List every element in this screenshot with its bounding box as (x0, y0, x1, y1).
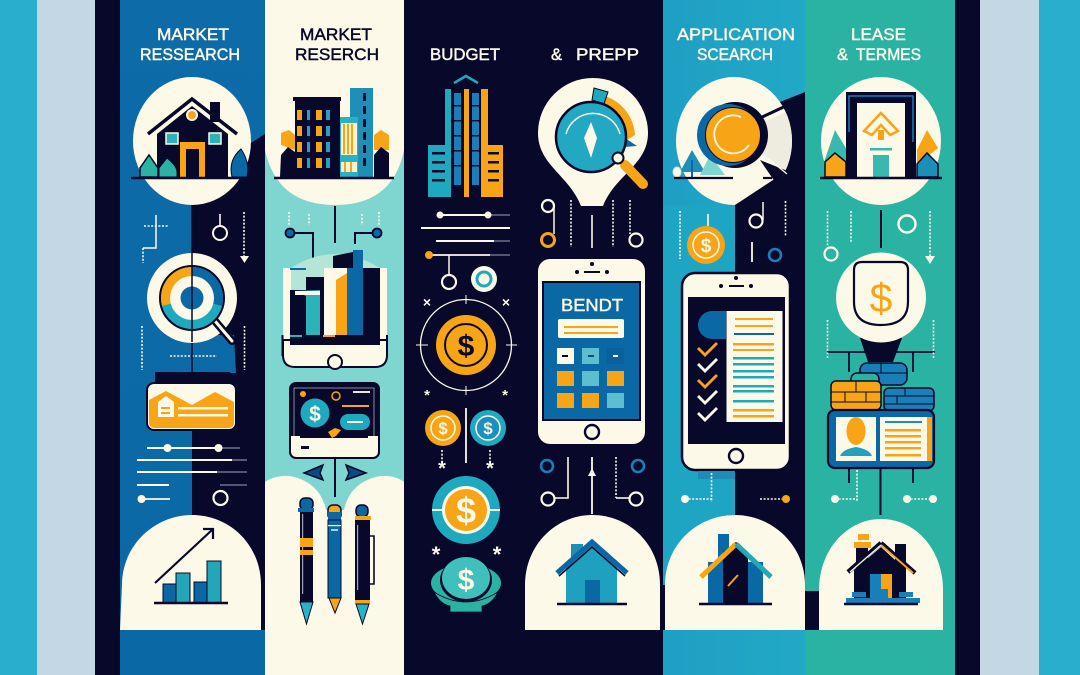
icon: large coin: * (432, 542, 441, 567)
connectors (286, 206, 382, 262)
panel: column 2 market research (265, 0, 404, 675)
icon: city buildings (274, 88, 394, 178)
connectors and coin: $ (701, 236, 712, 257)
heading (677, 26, 795, 64)
icon: two coins: * (486, 458, 494, 480)
icon: monitor with dollar: $ (309, 403, 321, 426)
icon: two coins (425, 408, 506, 480)
icon: magnifier pin (538, 78, 648, 206)
icon: coin with compass ring: × (502, 294, 510, 310)
icon: coin with compass ring: * (502, 387, 508, 404)
icon: house in arch (819, 519, 943, 630)
heading: TERMES (856, 46, 921, 64)
icon: tablet with bar chart (282, 250, 387, 369)
icon: magnifier with donut chart (147, 253, 237, 343)
sliders (421, 212, 510, 292)
panel: column 1 market research (120, 0, 265, 675)
connectors lower (831, 468, 937, 515)
heading (295, 26, 379, 64)
icon: tower (428, 76, 503, 197)
icon: coin stack (431, 557, 501, 612)
connectors mid (827, 320, 935, 372)
heading: RESSEARCH (140, 46, 240, 64)
heading: & (837, 46, 848, 64)
connectors and coin (680, 201, 786, 264)
icon: two coins: $ (483, 419, 493, 438)
connectors lower (541, 457, 644, 514)
icon: two coins: * (438, 458, 446, 480)
heading: RESERCH (295, 46, 379, 64)
icon: phone checklist (682, 273, 790, 470)
dotted connectors (681, 471, 790, 503)
icon: large coin: * (493, 542, 502, 567)
icon: doorway in circle (820, 77, 942, 205)
screen heading: BENDT (561, 295, 623, 315)
icon: magnifier in circle (673, 77, 805, 205)
icon: two coins: $ (438, 419, 448, 438)
heading: MARKET (157, 26, 229, 44)
heading: BUDGET (430, 46, 500, 64)
icon: large coin (432, 476, 502, 567)
icon: coin with compass ring: * (424, 387, 430, 404)
arrows (304, 458, 366, 497)
heading: LEASE (851, 26, 906, 44)
panel: column 4 prep (525, 46, 660, 630)
icon: dollar shield (836, 252, 926, 362)
connectors (542, 200, 642, 248)
icon: house in arch (525, 515, 660, 630)
panel: column 5 application search (663, 0, 805, 675)
heading: & (551, 46, 562, 64)
icon: growth chart in arch (120, 515, 261, 630)
icon: coin with compass ring (416, 294, 517, 404)
icon: dollar shield: $ (870, 275, 893, 321)
heading (837, 26, 921, 64)
icon: coin with compass ring: $ (458, 330, 475, 363)
heading (140, 26, 240, 64)
icon: house in arch (665, 515, 805, 630)
heading: MARKET (300, 26, 372, 44)
heading: APPLICATION (677, 26, 795, 44)
panel: column 3 budget (416, 46, 517, 612)
heading: PREPP (576, 46, 639, 64)
sliders (137, 444, 247, 505)
icon: listing card (147, 372, 236, 430)
connectors (824, 210, 935, 264)
icon: coin with compass ring: × (423, 294, 431, 310)
icon: phone with calculator (538, 259, 645, 444)
icon: id card (828, 410, 934, 468)
heading (551, 46, 639, 64)
icon: house in circle (131, 77, 251, 205)
panel: column 6 lease and terms (805, 0, 955, 675)
icon: coin stack: $ (458, 564, 475, 597)
heading: SCEARCH (697, 46, 773, 64)
icon: three pens (298, 498, 374, 624)
connectors (142, 205, 249, 373)
icon: coin stacks (831, 363, 934, 411)
icon: monitor with dollar (290, 383, 379, 458)
icon: large coin: $ (456, 490, 476, 531)
